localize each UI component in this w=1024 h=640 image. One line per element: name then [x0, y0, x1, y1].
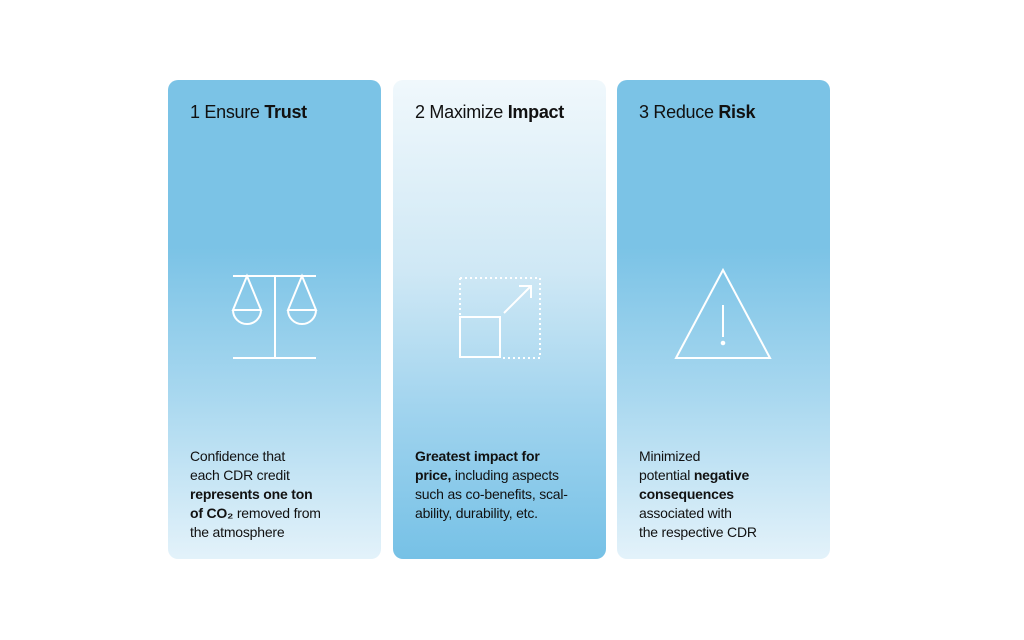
icon: scales [232, 274, 318, 359]
text: risk description: associated with [639, 505, 732, 521]
text: risk description: Minimized [639, 448, 700, 464]
panel: maximize impact [393, 80, 606, 559]
heading: maximize impact: 2 Maximize Impact [415, 102, 564, 122]
text: impact description: Greatest impact for [415, 448, 540, 464]
text: trust description: represents one ton [190, 486, 312, 502]
text: risk description: consequences [639, 486, 734, 502]
text: trust description: of CO₂ removed from [190, 505, 321, 521]
text: impact description: such as co-benefits, scal- [415, 486, 568, 502]
text: risk description [639, 448, 757, 540]
text: impact description [415, 448, 568, 521]
heading: reduce risk: 3 Reduce Risk [639, 102, 755, 122]
text: risk description: the respective CDR [639, 524, 757, 540]
text: trust description: each CDR credit [190, 467, 290, 483]
text: risk description: potential negative [639, 467, 749, 483]
icon: scale up [459, 277, 541, 359]
text: trust description: Confidence that [190, 448, 285, 464]
text: impact description: ability, durability, etc. [415, 505, 538, 521]
text: impact description: price, including aspects [415, 467, 559, 483]
panel: ensure trust [168, 80, 381, 559]
icon: warning [674, 268, 772, 359]
text: trust description [190, 448, 321, 540]
text: trust description: the atmosphere [190, 524, 284, 540]
panel: reduce risk [617, 80, 830, 559]
heading: ensure trust: 1 Ensure Trust [190, 102, 307, 122]
